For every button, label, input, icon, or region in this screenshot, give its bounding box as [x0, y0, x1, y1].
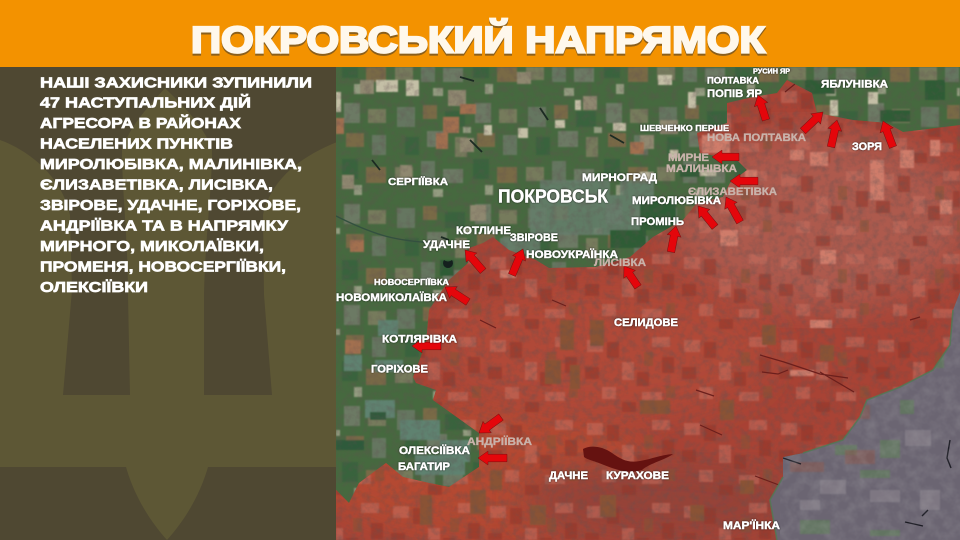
labels: settlements: ЗВІРОВЕ: [510, 232, 558, 244]
text block: daily summary: МИРНОГО, МИКОЛАЇВКИ,: [40, 238, 264, 255]
text block: daily summary: ЗВІРОВЕ, УДАЧНЕ, ГОРІХОВЕ,: [40, 197, 301, 214]
text block: daily summary: [40, 74, 312, 296]
area: occupied territory red overlay: [310, 67, 960, 540]
text block: daily summary: ОЛЕКСІЇВКИ: [40, 279, 148, 296]
labels: settlements: НОВОМИКОЛАЇВКА: [336, 291, 447, 304]
labels: settlements: ПРОМІНЬ: [631, 216, 684, 228]
text block: daily summary: ПРОМЕНЯ, НОВОСЕРГІЇВКИ,: [40, 258, 286, 276]
icon: Kurakhove reservoir: [583, 447, 673, 472]
labels: settlements: ГОРІХОВЕ: [371, 364, 428, 376]
labels: settlements: ПОКРОВСЬК: [498, 186, 609, 206]
labels: settlements: ШЕВЧЕНКО ПЕРШЕ: [640, 123, 729, 133]
labels: settlements: КОТЛЯРІВКА: [382, 334, 457, 346]
text block: daily summary: МИРОЛЮБІВКА, МАЛИНІВКА,: [40, 156, 302, 173]
labels: settlements: ПОЛТАВКА: [707, 76, 759, 86]
text block: daily summary: 47 НАСТУПАЛЬНИХ ДІЙ: [40, 94, 251, 112]
map: satellite base with occupied area: [310, 67, 960, 540]
labels: settlements: НОВОУКРАЇНКА: [526, 248, 618, 261]
text block: daily summary: НАШІ ЗАХИСНИКИ ЗУПИНИЛИ: [40, 74, 312, 92]
labels: settlements: ПОПІВ ЯР: [707, 88, 762, 100]
labels: settlements: МИРОЛЮБІВКА: [632, 195, 721, 207]
labels: faded settlements: ЛИСІВКА: [594, 257, 646, 269]
labels: settlements: ЯБЛУНІВКА: [821, 78, 888, 90]
text block: daily summary: ЄЛИЗАВЕТІВКА, ЛИСІВКА,: [40, 176, 273, 194]
labels: settlements: ДАЧНЕ: [549, 470, 588, 482]
area: urban grey zone: [770, 290, 960, 540]
labels: faded settlements: МАЛИНІВКА: [666, 163, 737, 175]
title: ПОКРОВСЬКИЙ НАПРЯМОК: [191, 18, 765, 60]
text block: daily summary: АГРЕСОРА В РАЙОНАХ: [40, 114, 241, 132]
labels: settlements: СЕРГІЇВКА: [388, 175, 448, 188]
text block: daily summary: АНДРІЇВКА ТА В НАПРЯМКУ: [40, 218, 289, 234]
labels: settlements: РУСИН ЯР: [753, 68, 790, 76]
labels: faded settlements: НОВА ПОЛТАВКА: [707, 132, 806, 144]
labels: faded settlements: МИРНЕ: [668, 152, 709, 164]
labels: settlements: БАГАТИР: [398, 461, 450, 473]
labels: settlements: [336, 68, 888, 532]
labels: settlements: КОТЛИНЕ: [456, 225, 511, 237]
labels: settlements: КУРАХОВЕ: [606, 470, 669, 482]
labels: faded settlements: АНДРІЇВКА: [467, 435, 532, 448]
arrows: red attack directions: [412, 93, 900, 465]
labels: settlements: ОЛЕКСІЇВКА: [399, 444, 470, 457]
labels: faded settlements: [467, 132, 806, 448]
emblem: trident watermark: [0, 88, 337, 540]
panel: left text panel: [0, 67, 337, 540]
labels: settlements: ЗОРЯ: [852, 141, 882, 153]
labels: settlements: НОВОСЕРГІЇВКА: [374, 277, 449, 287]
labels: settlements: СЕЛИДОВЕ: [614, 317, 678, 329]
labels: settlements: МИРНОГРАД: [582, 172, 657, 184]
text block: daily summary: НАСЕЛЕНИХ ПУНКТІВ: [40, 136, 233, 152]
labels: settlements: МАР'ЇНКА: [723, 519, 780, 532]
labels: faded settlements: ЄЛИЗАВЕТІВКА: [688, 186, 777, 198]
header: orange title bar: [0, 0, 960, 67]
labels: settlements: УДАЧНЕ: [423, 239, 470, 251]
